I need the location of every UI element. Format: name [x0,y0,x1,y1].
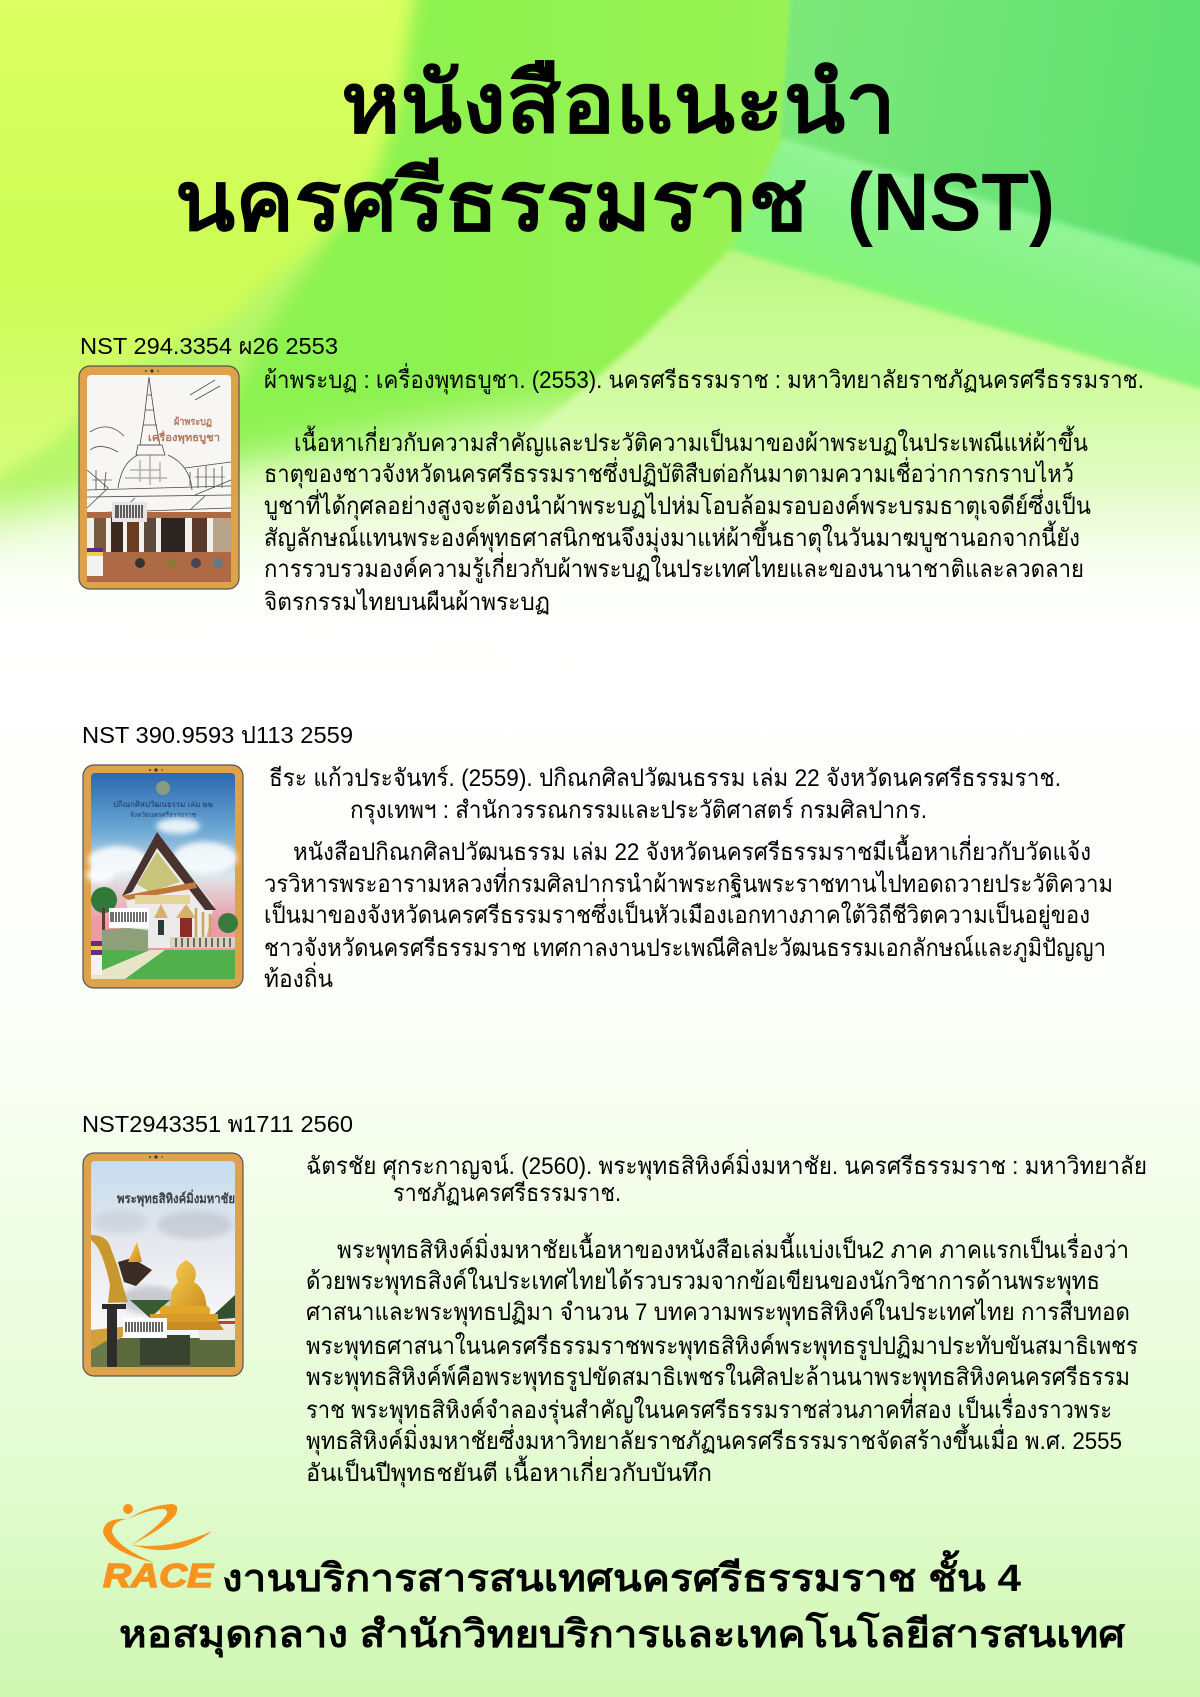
footer text: งานบริการสารสนเทศนครศรีธรรมราช ชั้น 4 [222,1550,1021,1600]
citation 2: กรุงเทพฯ : สำนักวรรณกรรมและประวัติศาสตร์ กรมศิลปากร. [350,796,927,825]
icon: RACE logo: RACE [103,1557,214,1594]
panel: book 1 [79,333,1144,616]
title: นครศรีธรรมราช [175,154,808,248]
description 1: การรวบรวมองค์ความรู้เกี่ยวกับผ้าพระบฏในประเทศไทยและของนานาชาติและลวดลาย [264,552,1084,584]
call number 2: NST 390.9593 ป113 2559 [82,722,353,748]
description 2 [264,834,1113,993]
book cover 3: พระพุทธสิหิงค์มิ่งมหาชัย [117,1189,235,1207]
description 1 [264,425,1091,616]
panel: book 2 [82,722,1113,993]
book cover 2: ปกิณกศิลปวัฒนธรรม เล่ม ๒๒ [113,800,213,809]
description 2: วรวิหารพระอารามหลวงที่กรมศิลปากรนำผ้าพระกฐินพระราชทานไปทอดถวายประวัติความ [264,867,1113,898]
footer text [119,1550,1126,1658]
title: หนังสือแนะนำ [341,56,896,150]
footer text: หอสมุดกลาง สำนักวิทยบริการและเทคโนโลยีสารสนเทศ [119,1611,1126,1658]
citation 2 [269,764,1061,825]
title: (NST) [847,157,1055,248]
call number 3: NST2943351 พ1711 2560 [82,1111,353,1137]
description 1: สัญลักษณ์แทนพระองค์พุทธศาสนิกชนจึงมุ่งมาแห่ผ้าขึ้นธาตุในวันมาฆบูชานอกจากนี้ยัง [264,520,1080,553]
description 1: จิตรกรรมไทยบนผืนผ้าพระบฏ [264,588,550,616]
call number 1: NST 294.3354 ผ26 2553 [80,333,338,359]
title [175,56,1055,248]
book cover 1: ผ้าพระบฏ [174,416,212,428]
description 2: ชาวจังหวัดนครศรีธรรมราช เทศกาลงานประเพณีศิลปะวัฒนธรรมเอกลักษณ์และภูมิปัญญา [264,934,1106,963]
book cover 1: เครื่องพุทธบูชา [148,430,220,445]
description 3: พระพุทธสิหิงค์พ์คือพระพุทธรูปขัดสมาธิเพชรในศิลปะล้านนาพระพุทธสิหิงคนครศรีธรรม [306,1363,1130,1392]
description 1: บูชาที่ได้กุศลอย่างสูงจะต้องนำผ้าพระบฏไปห่มโอบล้อมรอบองค์พระบรมธาตุเจดีย์ซึ่งเป็น [264,489,1091,521]
book cover 3 [83,1153,243,1376]
citation 3: ราชภัฏนครศรีธรรมราช. [393,1180,621,1207]
book cover 2: จังหวัดนครศรีธรรมราช [130,811,196,819]
description 3: พระพุทธสิหิงค์มิ่งมหาชัยเนื้อหาของหนังสือเล่มนี้แบ่งเป็น2 ภาค ภาคแรกเป็นเรื่องว่า [337,1232,1129,1265]
description 3: ด้วยพระพุทธสิงค์ในประเทศไทยได้รวบรวมจากข้อเขียนของนักวิชาการด้านพระพุทธ [306,1267,1100,1296]
book cover 1 [79,366,239,589]
description 2: เป็นมาของจังหวัดนครศรีธรรมราชซึ่งเป็นหัวเมืองเอกทางภาคใต้วิถีชีวิตความเป็นอยู่ของ [264,898,1090,930]
panel: book 3 [82,1111,1147,1488]
description 1: เนื้อหาเกี่ยวกับความสำคัญและประวัติความเป็นมาของผ้าพระบฏในประเพณีแห่ผ้าขึ้น [294,425,1088,457]
description 1: ธาตุของชาวจังหวัดนครศรีธรรมราชซึ่งปฏิบัติสืบต่อกันมาตามความเชื่อว่าการกราบไหว้ [264,457,1074,489]
description 3 [306,1232,1138,1488]
description 2: ท้องถิ่น [264,962,333,993]
citation 1: ผ้าพระบฏ : เครื่องพุทธบูชา. (2553). นครศรีธรรมราช : มหาวิทยาลัยราชภัฏนครศรีธรรมราช. [264,363,1144,395]
description 3: พุทธสิหิงค์มิ่งมหาชัยซึ่งมหาวิทยาลัยราชภัฏนครศรีธรรมราชจัดสร้างขึ้นเมื่อ พ.ศ. 2555 [306,1423,1122,1456]
icon: RACE logo [103,1504,214,1594]
description 3: อันเป็นปีพุทธชยันตี เนื้อหาเกี่ยวกับบันทึก [306,1455,712,1488]
description 3: ศาสนาและพระพุทธปฏิมา จำนวน 7 บทความพระพุทธสิหิงค์ในประเทศไทย การสืบทอด [306,1298,1130,1327]
description 2: หนังสือปกิณกศิลปวัฒนธรรม เล่ม 22 จังหวัดนครศรีธรรมราชมีเนื้อหาเกี่ยวกับวัดแจ้ง [293,834,1091,866]
citation 3 [306,1149,1147,1207]
description 3: พระพุทธศาสนาในนครศรีธรรมราชพระพุทธสิหิงค์พระพุทธรูปปฏิมาประทับขันสมาธิเพชร [306,1332,1138,1361]
citation 3: ฉัตรชัย ศุกระกาญจน์. (2560). พระพุทธสิหิงค์มิ่งมหาชัย. นครศรีธรรมราช : มหาวิทยาลัย [306,1149,1147,1181]
book cover 2 [83,765,243,988]
description 3: ราช พระพุทธสิหิงค์จำลองรุ่นสำคัญในนครศรีธรรมราชส่วนภาคที่สอง เป็นเรื่องราวพระ [306,1393,1112,1425]
citation 2: ธีระ แก้วประจันทร์. (2559). ปกิณกศิลปวัฒนธรรม เล่ม 22 จังหวัดนครศรีธรรมราช. [269,764,1061,792]
